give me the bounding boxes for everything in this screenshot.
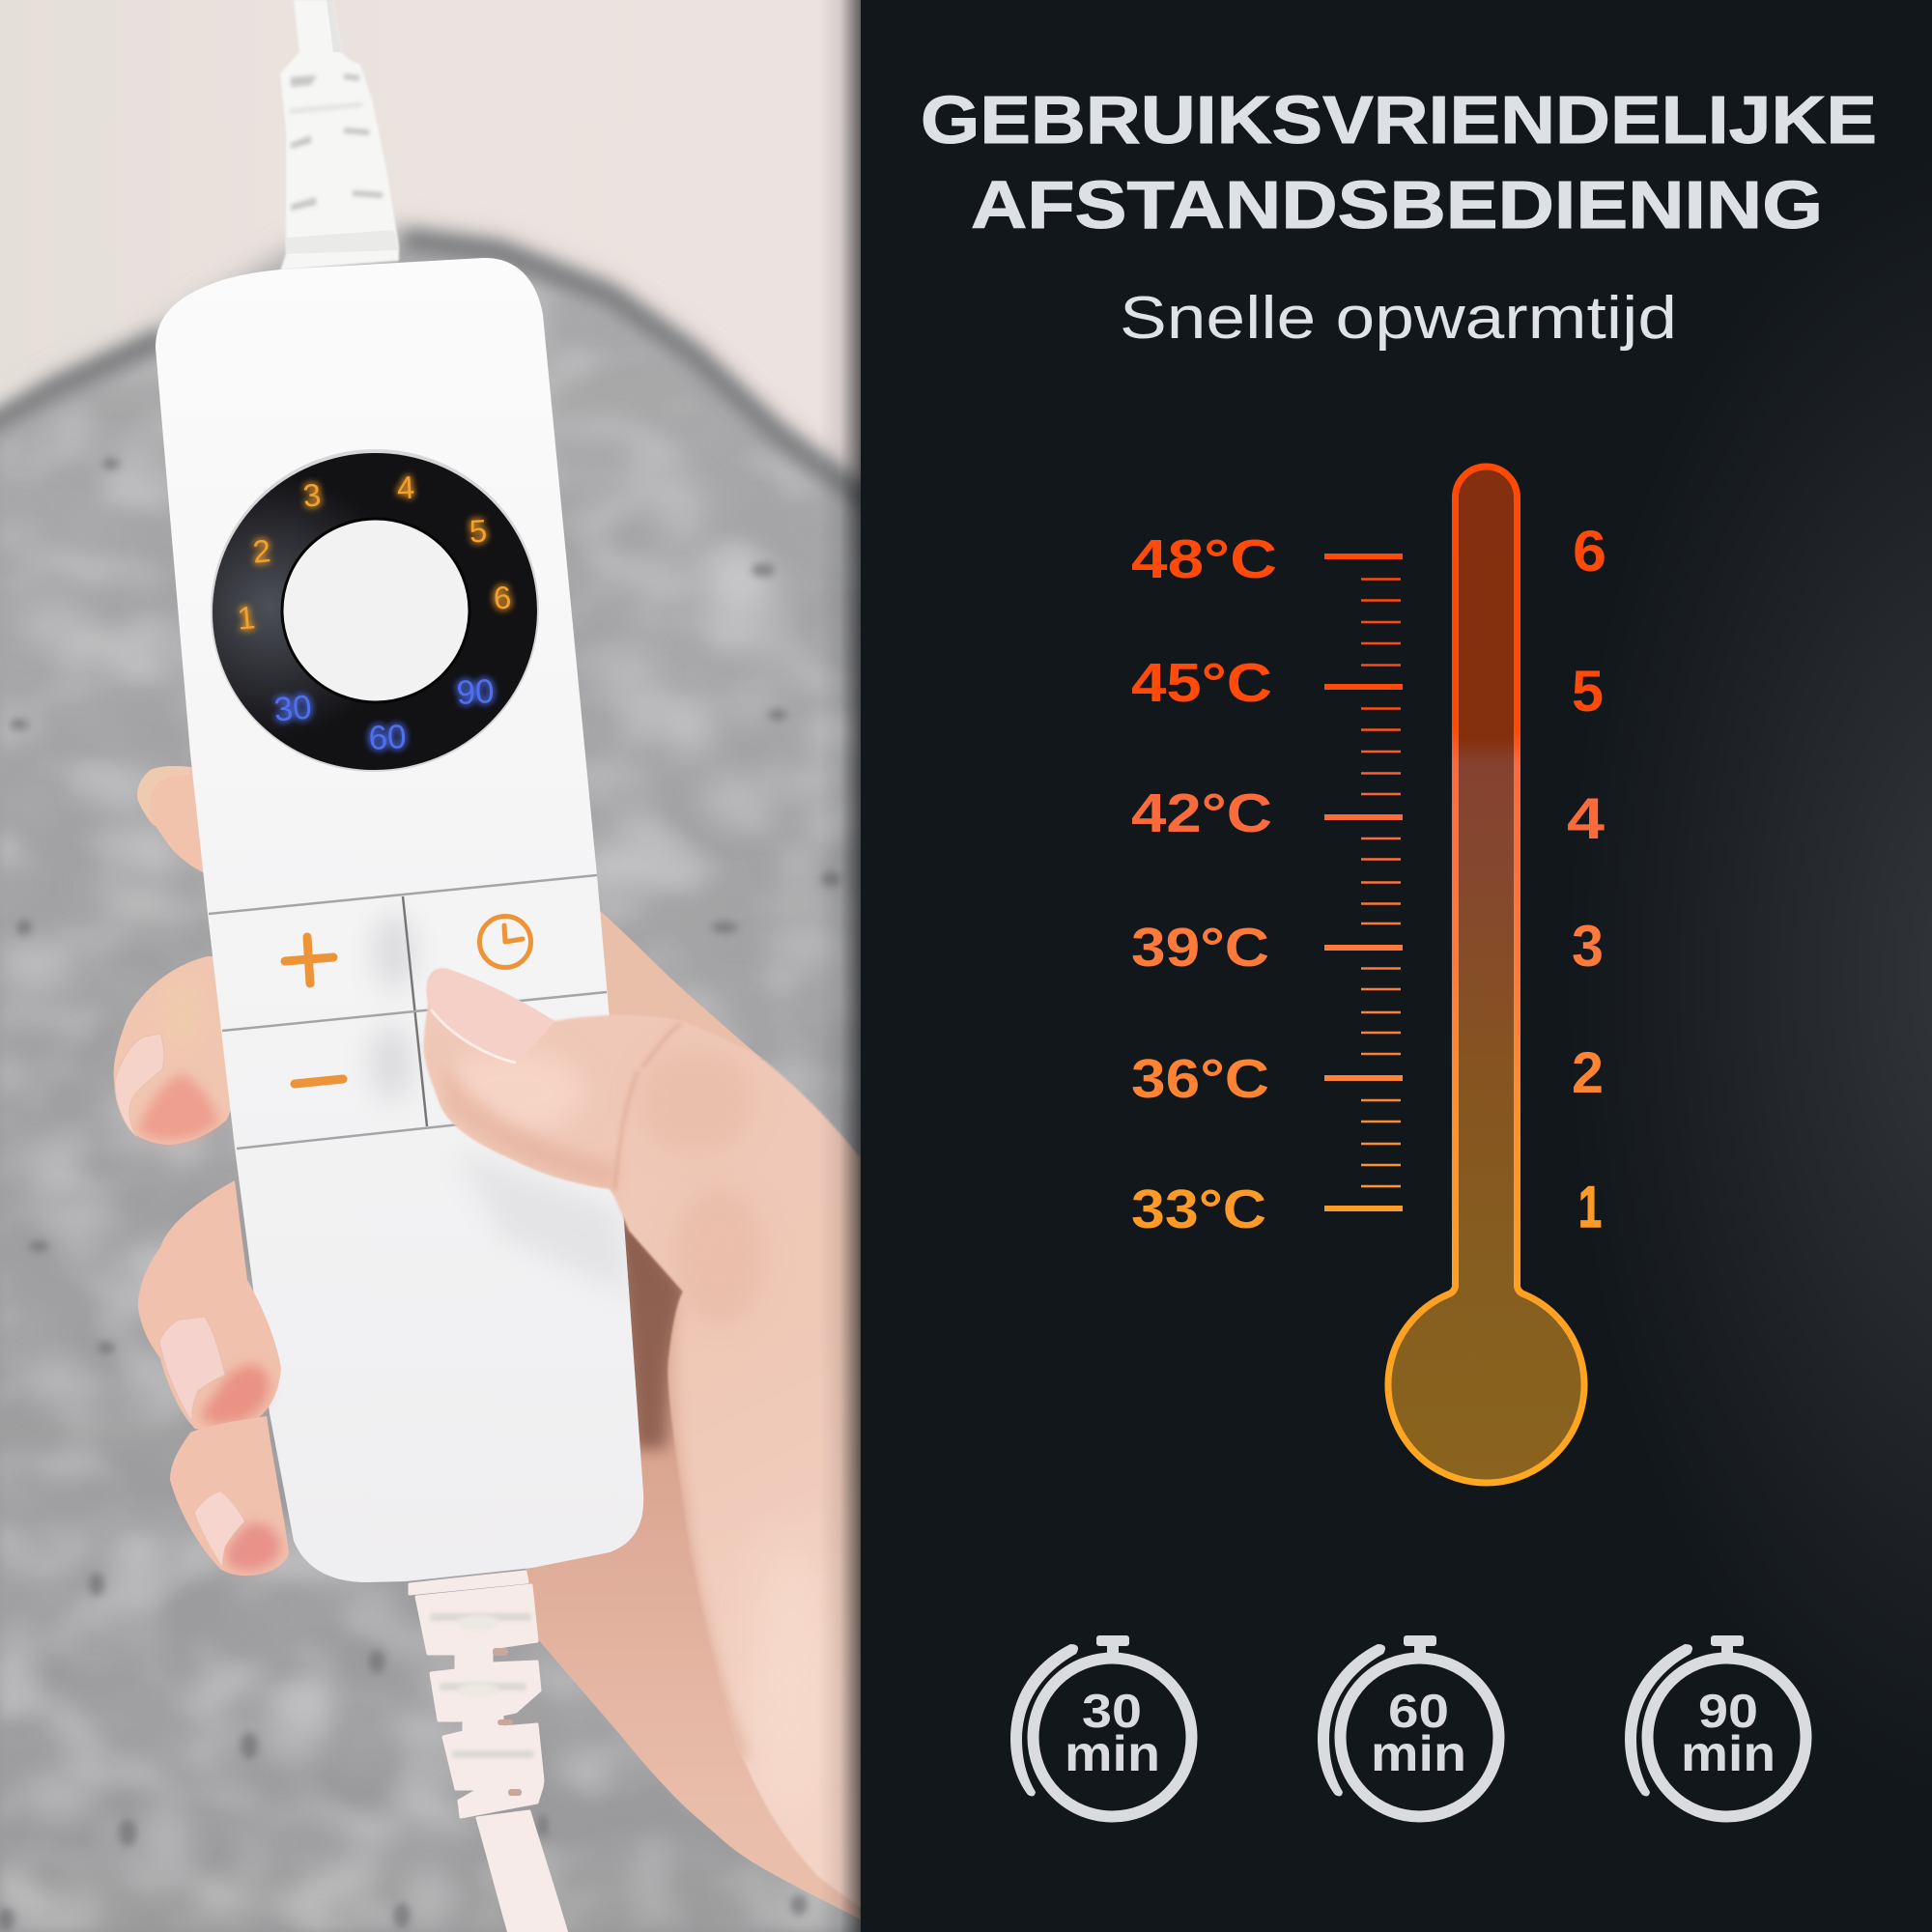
pad edge band — [0, 240, 869, 503]
hand: palm and fold behind thumb — [522, 894, 861, 1919]
timer icon: 60 min — [1318, 1635, 1499, 1816]
finger: middle finger behind remote — [114, 956, 242, 1145]
timer icon: 90 min: min — [1681, 1726, 1776, 1782]
timer icon: 60 min: 60 — [1388, 1686, 1449, 1738]
background: pale wall — [0, 0, 861, 493]
timer icon: 60 min: min — [1371, 1726, 1466, 1782]
dial: heat level numbers: 2 — [251, 532, 272, 570]
timer icon: 30 min: min — [1065, 1726, 1160, 1782]
icon: minus — [295, 1079, 343, 1084]
dial: heat level numbers: 5 — [469, 513, 488, 549]
temperature labels: 33°C — [1131, 1179, 1266, 1240]
nail — [159, 1317, 225, 1422]
remote: soft shading around thumb — [373, 913, 415, 990]
title — [921, 82, 1877, 242]
title: GEBRUIKSVRIENDELIJKE — [921, 82, 1877, 157]
photo panel: hand holding remote over heating pad — [0, 0, 898, 1932]
icon: plus — [285, 937, 333, 983]
timer icon: 30 min — [1010, 1635, 1192, 1816]
temperature labels: 48°C — [1131, 528, 1277, 590]
finger: index tip behind remote — [137, 766, 203, 872]
photo edge shadow — [819, 0, 861, 1932]
dial: heat level numbers: 6 — [493, 580, 512, 615]
heat level numbers: 6 — [1573, 519, 1606, 583]
heat level numbers — [1567, 519, 1606, 1239]
cable: top cord with strain relief — [280, 0, 399, 270]
title: AFSTANDSBEDIENING — [971, 167, 1823, 242]
remote control body — [156, 258, 643, 1582]
dial: heat level numbers: 4 — [396, 469, 415, 505]
thumb and front of hand — [423, 968, 861, 1908]
heating pad — [0, 222, 898, 1932]
timer icon: 30 min: 30 — [1082, 1686, 1142, 1738]
dial: timer numbers: 60 — [368, 718, 408, 757]
finger: little finger over remote — [170, 1416, 289, 1576]
temperature scale ticks — [1324, 556, 1403, 1208]
icon: clock — [479, 916, 531, 968]
pad light tufts — [0, 473, 837, 1929]
remote: button divider lines — [209, 875, 607, 1149]
pad texture — [0, 222, 861, 1932]
heat level numbers: 2 — [1572, 1040, 1604, 1105]
dial: timer numbers: 90 — [456, 672, 496, 712]
hand: back of hand above thumb — [570, 894, 762, 1059]
temperature labels: 36°C — [1131, 1048, 1269, 1110]
heat level numbers: 3 — [1572, 914, 1604, 979]
temperature labels: 42°C — [1131, 782, 1272, 844]
finger: ring finger over remote — [138, 1180, 281, 1430]
pad dimples — [0, 458, 840, 1931]
nail — [115, 1034, 164, 1136]
heat level numbers: 1 — [1578, 1175, 1602, 1239]
nail — [195, 1492, 244, 1566]
heat level numbers: 4 — [1567, 786, 1605, 851]
hand: dark fold next to remote — [618, 1208, 686, 1449]
dial: heat level numbers — [236, 469, 512, 637]
panel: dark information background — [861, 0, 1932, 1932]
dial: timer numbers — [272, 672, 496, 757]
dial: heat level numbers: 1 — [236, 599, 257, 637]
heat level numbers: 5 — [1572, 659, 1604, 724]
timer icon: 90 min: 90 — [1698, 1686, 1758, 1738]
cable: bottom cord with strain relief — [410, 1572, 568, 1932]
temperature labels: 45°C — [1131, 652, 1272, 714]
timer icon: 90 min — [1625, 1635, 1806, 1816]
thermometer — [1388, 467, 1584, 1483]
dial: timer numbers: 30 — [272, 688, 313, 729]
dial ring — [194, 433, 555, 788]
subtitle: Snelle opwarmtijd — [1120, 285, 1677, 352]
temperature labels — [1131, 528, 1277, 1240]
thumb nail — [427, 969, 554, 1063]
temperature labels: 39°C — [1131, 917, 1269, 979]
dial: heat level numbers: 3 — [301, 476, 323, 514]
